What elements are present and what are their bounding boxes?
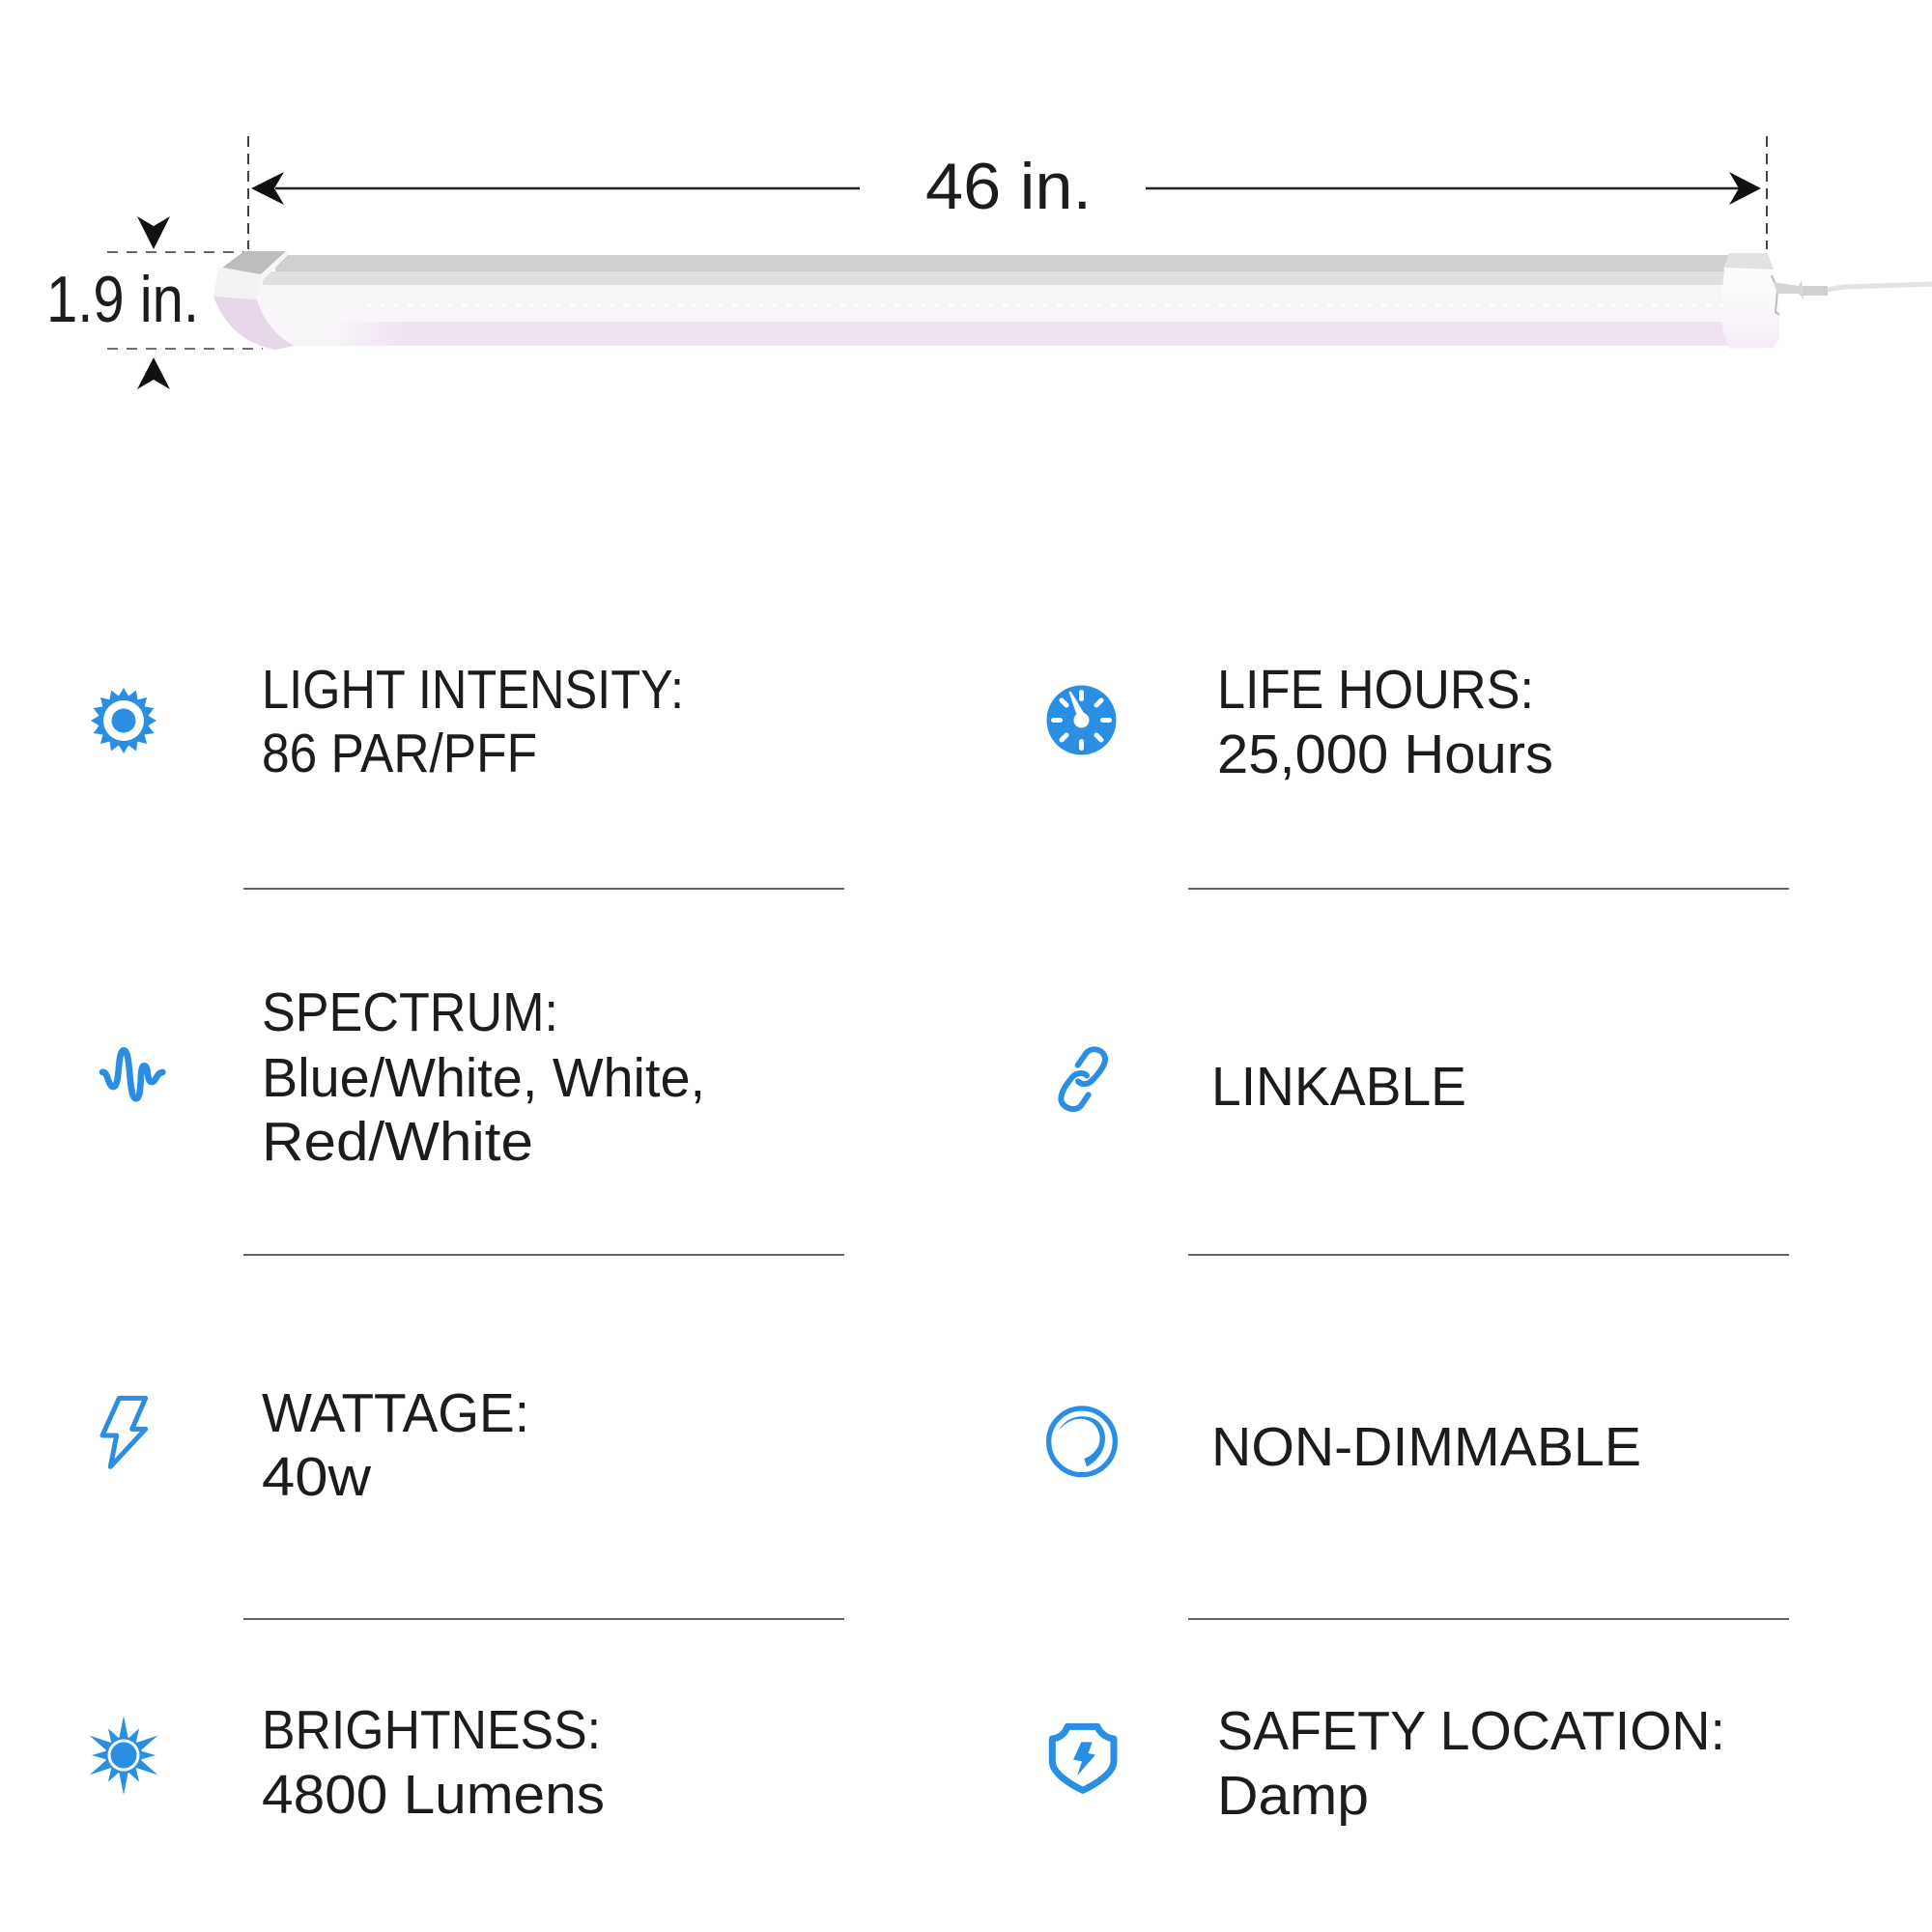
spec: brightness [87, 1699, 605, 1826]
right extension line [1766, 136, 1768, 249]
divider row 2 [243, 1254, 1789, 1256]
spec: linkable [1061, 1049, 1466, 1118]
text: wattage: WATTAGE: [262, 1382, 529, 1444]
text: wattage [262, 1382, 529, 1508]
left end cap [213, 251, 309, 350]
divider row 1 [243, 888, 1789, 890]
icon: lightning bolt [102, 1398, 146, 1466]
icon: bright sun [87, 1716, 160, 1795]
text: wattage: 40w [262, 1446, 372, 1508]
height label: 1.9 in. [46, 263, 199, 336]
spec: wattage [102, 1382, 529, 1508]
icon: gear sun [91, 688, 156, 753]
text: spectrum [262, 981, 705, 1173]
right arrow [1146, 172, 1761, 205]
text: brightness: 4800 Lumens [262, 1764, 605, 1826]
width label: 46 in. [925, 150, 1092, 223]
text: light intensity: LIGHT INTENSITY: [262, 659, 684, 721]
top extension line [107, 251, 243, 253]
text: life hours [1217, 659, 1553, 785]
text: spectrum: Blue/White, White, [262, 1047, 705, 1109]
down arrow [137, 216, 170, 249]
text: spectrum: SPECTRUM: [262, 981, 558, 1043]
spec: spectrum [102, 981, 705, 1173]
text: linkable: LINKABLE [1211, 1056, 1466, 1118]
divider row 3 [243, 1618, 1789, 1620]
left arrow [251, 172, 860, 205]
text: brightness: BRIGHTNESS: [262, 1699, 601, 1761]
tube body [259, 255, 1729, 346]
spec: non-dimmable [1049, 1408, 1641, 1478]
bottom extension line [107, 348, 263, 350]
spec: light intensity [91, 659, 684, 784]
left extension line [247, 136, 249, 249]
icon: shield with bolt [1052, 1726, 1114, 1790]
text: light intensity: 86 PAR/PFF [262, 723, 537, 784]
text: safety location [1217, 1700, 1725, 1827]
up arrow [137, 357, 170, 389]
height dimension: 1.9 in. [46, 216, 263, 389]
power cord [1772, 275, 1932, 315]
width dimension: 46 in. [248, 136, 1767, 249]
right end cap [1722, 253, 1779, 349]
icon: ring [1049, 1408, 1115, 1475]
text: brightness [262, 1699, 605, 1826]
text: safety location: Damp [1217, 1765, 1369, 1827]
text: light intensity [262, 659, 684, 784]
icon: chain link [1061, 1049, 1105, 1109]
LED tube light [213, 251, 1932, 350]
text: life hours: LIFE HOURS: [1217, 659, 1534, 721]
spec: safety location [1052, 1700, 1725, 1827]
text: safety location: SAFETY LOCATION: [1217, 1700, 1725, 1762]
icon: dial clock [1047, 686, 1117, 755]
text: non-dimmable: NON-DIMMABLE [1211, 1416, 1641, 1478]
icon: wave [102, 1050, 162, 1098]
text: life hours: 25,000 Hours [1217, 724, 1553, 785]
text: spectrum: Red/White [262, 1111, 533, 1173]
spec: life hours [1047, 659, 1553, 785]
